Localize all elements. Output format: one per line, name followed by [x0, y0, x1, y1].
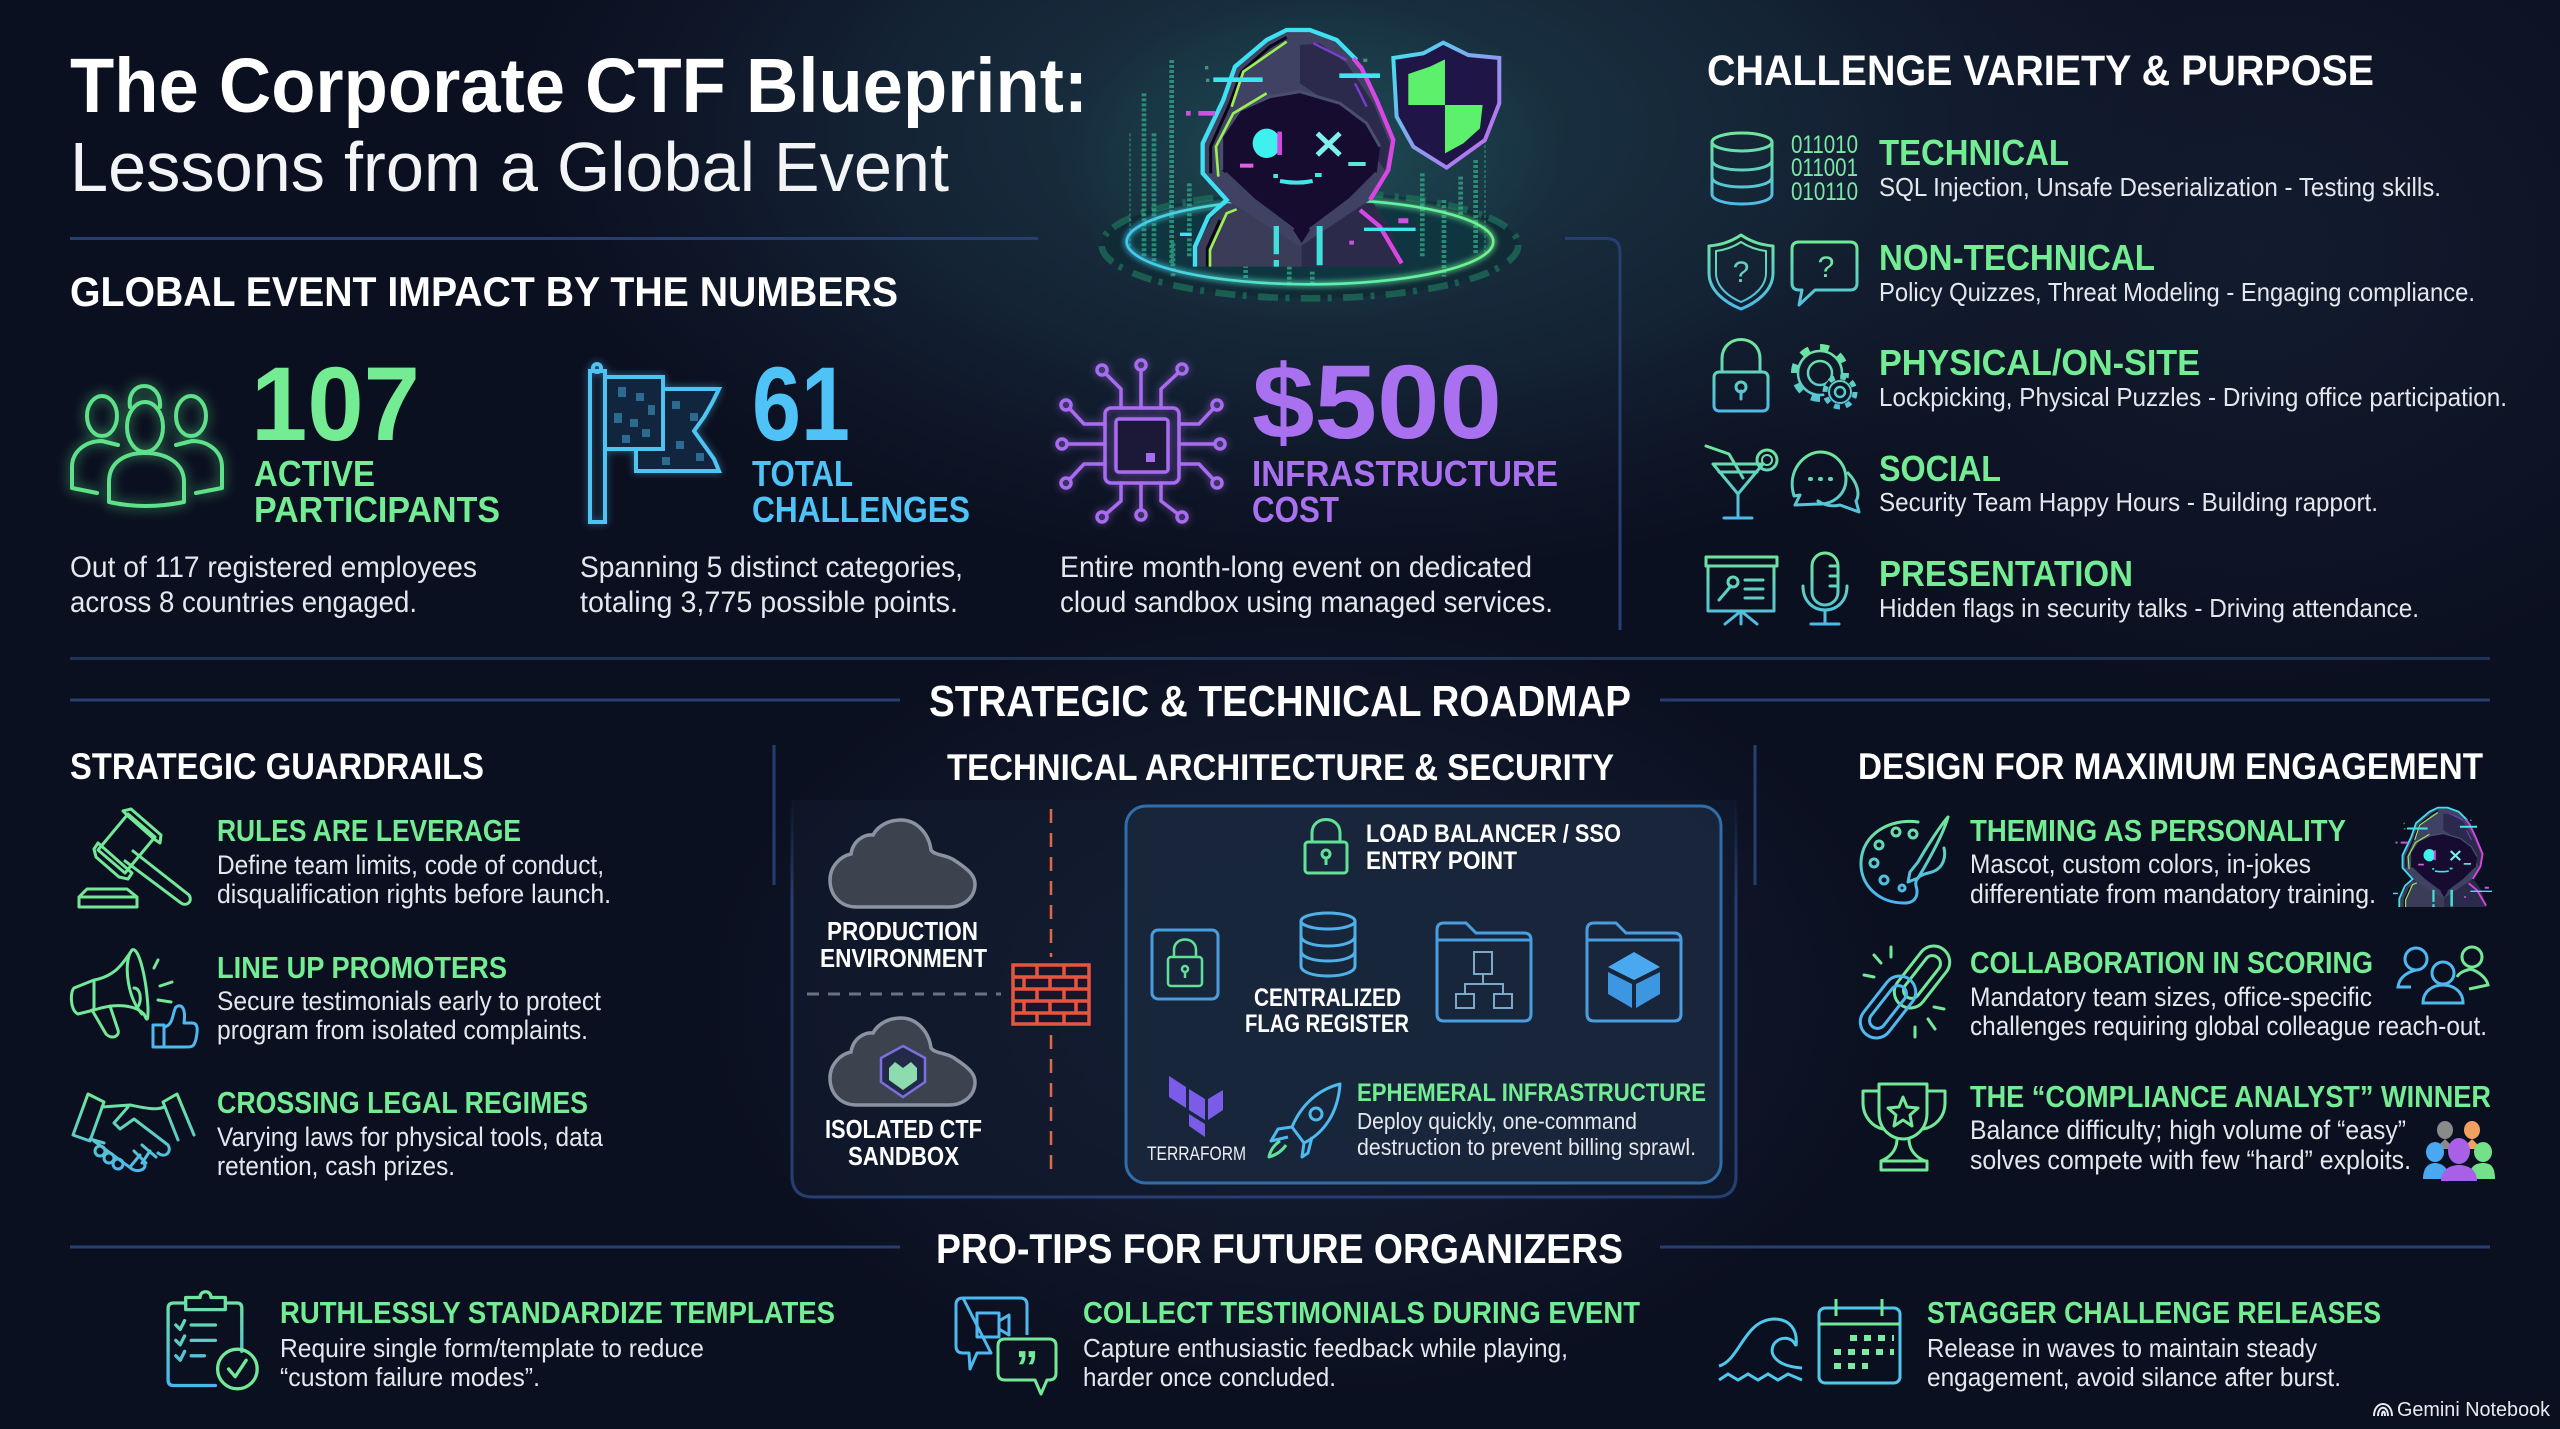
row: non-technical: Policy Quizzes, Threat Modeling - Engaging compliance.: [1879, 277, 2475, 307]
panel: cloud sandbox internals: ENTRY POINT: [1366, 847, 1517, 875]
row: non-technical: [1709, 235, 2475, 309]
item: collaboration in scoring: Mandatory team sizes, office-specific: [1970, 982, 2372, 1012]
item: line up promoters: LINE UP PROMOTERS: [217, 950, 507, 985]
item: crossing legal regimes: retention, cash prizes.: [217, 1151, 455, 1181]
item: crossing legal regimes: Varying laws for physical tools, data: [217, 1122, 604, 1152]
panel: cloud sandbox internals: FLAG REGISTER: [1245, 1010, 1409, 1038]
panel: design for maximum engagement: [1854, 746, 2495, 1181]
item: theming as personality: differentiate from mandatory training.: [1970, 879, 2376, 909]
stat: 107 active participants: 107: [251, 346, 420, 463]
item: line up promoters: program from isolated complaints.: [217, 1015, 588, 1045]
section heading: global event impact: GLOBAL EVENT IMPACT BY THE NUMBERS: [70, 268, 898, 315]
icon: firewall: [1013, 965, 1089, 1024]
title: Lessons from a Global Event: [70, 128, 949, 206]
panel: challenge variety and purpose: CHALLENGE VARIETY & PURPOSE: [1707, 47, 2374, 95]
row: physical on-site: PHYSICAL/ON-SITE: [1879, 342, 2200, 383]
stat: $500 infrastructure cost: $500: [1252, 344, 1502, 461]
icon: entry lock: [1305, 820, 1347, 873]
icon: calendar: [1819, 1299, 1900, 1383]
icon: database: [1712, 133, 1772, 204]
stat: 107 active participants: ACTIVE: [254, 453, 375, 494]
icon: folder cube: [1587, 923, 1681, 1021]
item: compliance analyst winner: solves compete with few “hard” exploits.: [1970, 1145, 2411, 1175]
icon: folder network: [1437, 923, 1531, 1021]
hero mascot: hooded hacker with shield on portal ring: [1057, 0, 1563, 327]
icon: gavel: [79, 809, 190, 907]
icon: trophy: [1863, 1084, 1945, 1170]
panel: cloud sandbox internals: [1126, 806, 1721, 1183]
icon: clipboard: [168, 1292, 257, 1389]
icon: terraform logo: [1169, 1076, 1223, 1137]
panel: cloud sandbox internals: TERRAFORM: [1147, 1144, 1246, 1165]
item: theming as personality: [1861, 808, 2492, 909]
icon: shield and question bubble: [1709, 235, 1773, 309]
row: physical on-site: [1714, 340, 2507, 412]
item: crossing legal regimes: CROSSING LEGAL REGIMES: [217, 1085, 588, 1120]
tip: collect testimonials: Capture enthusiastic feedback while playing,: [1083, 1333, 1568, 1363]
icon: cocktail: [1706, 446, 1777, 518]
tip: standardize templates: RUTHLESSLY STANDARDIZE TEMPLATES: [280, 1295, 835, 1330]
tip: standardize templates: “custom failure modes”.: [280, 1362, 540, 1392]
icon: megaphone with thumbs up: [71, 950, 172, 1037]
row: technical: 011010: [1791, 131, 1858, 159]
tip: standardize templates: Require single form/template to reduce: [280, 1333, 704, 1363]
item: line up promoters: [71, 950, 601, 1047]
item: theming as personality: THEMING AS PERSONALITY: [1970, 813, 2346, 848]
stat: 107 active participants: across 8 countries engaged.: [70, 586, 417, 619]
icon: presentation board: [1706, 557, 1777, 624]
title: [70, 43, 1088, 206]
item: rules are leverage: RULES ARE LEVERAGE: [217, 813, 521, 848]
stat: $500 infrastructure cost: INFRASTRUCTURE: [1252, 453, 1558, 494]
zone: production and sandbox: PRODUCTION: [827, 916, 978, 946]
stat: 61 total challenges: [580, 346, 970, 619]
stat: $500 infrastructure cost: cloud sandbox using managed services.: [1060, 586, 1553, 619]
item: line up promoters: Secure testimonials early to protect: [217, 986, 601, 1016]
zone: production and sandbox: ENVIRONMENT: [820, 943, 987, 973]
item: theming as personality: Mascot, custom colors, in-jokes: [1970, 849, 2311, 879]
icon: video and quote bubbles: ”: [1016, 1341, 1038, 1393]
item: collaboration in scoring: [1854, 940, 2488, 1044]
panel: cloud sandbox internals: Deploy quickly, one-command: [1357, 1108, 1637, 1134]
icon: flag register database: [1301, 913, 1355, 976]
row: social: Security Team Happy Hours - Building rapport.: [1879, 487, 2378, 517]
stat: 61 total challenges: CHALLENGES: [752, 489, 970, 530]
icon: palette and brush: [1861, 817, 1948, 903]
panel: strategic guardrails: [70, 746, 611, 1181]
section heading: pro-tips: PRO-TIPS FOR FUTURE ORGANIZERS: [936, 1225, 1623, 1272]
icon: chat bubbles: [1792, 452, 1859, 512]
tip: stagger releases: Release in waves to maintain steady: [1927, 1333, 2317, 1363]
stat: 61 total challenges: TOTAL: [752, 453, 853, 494]
section heading: roadmap: STRATEGIC & TECHNICAL ROADMAP: [929, 677, 1631, 726]
tip: stagger releases: engagement, avoid silance after burst.: [1927, 1362, 2341, 1392]
stat: 107 active participants: PARTICIPANTS: [254, 489, 500, 530]
zone: production and sandbox: ISOLATED CTF: [825, 1114, 982, 1144]
tip: collect testimonials: harder once concluded.: [1083, 1362, 1336, 1392]
watermark: Gemini Notebook: [2397, 1399, 2551, 1421]
stat: $500 infrastructure cost: COST: [1252, 489, 1339, 530]
icon: circuit chip: [1057, 360, 1225, 522]
tip: collect testimonials: COLLECT TESTIMONIALS DURING EVENT: [1083, 1295, 1640, 1330]
row: presentation: Hidden flags in security talks - Driving attendance.: [1879, 593, 2419, 623]
panel: technical architecture and security: TECHNICAL ARCHITECTURE & SECURITY: [947, 747, 1614, 788]
item: collaboration in scoring: challenges requiring global colleague reach-out.: [1970, 1011, 2487, 1041]
item: collaboration in scoring: COLLABORATION IN SCORING: [1970, 945, 2373, 980]
stat: $500 infrastructure cost: Entire month-long event on dedicated: [1060, 551, 1532, 584]
panel: technical architecture and security: [792, 747, 1736, 1197]
icon: production cloud: [830, 820, 975, 907]
icon: pixel flag: [590, 364, 719, 522]
icon: padlock: [1714, 340, 1768, 411]
item: crossing legal regimes: [73, 1085, 604, 1181]
icon: gears: [1794, 347, 1856, 408]
icon: wave: [1719, 1319, 1802, 1380]
row: presentation: [1706, 553, 2419, 624]
panel: cloud sandbox internals: LOAD BALANCER / SSO: [1366, 820, 1621, 848]
title: The Corporate CTF Blueprint:: [70, 43, 1088, 129]
tip: standardize templates: [168, 1292, 835, 1392]
item: compliance analyst winner: [1863, 1079, 2495, 1181]
icon: team people: [2398, 947, 2488, 1003]
tip: collect testimonials: [956, 1295, 1640, 1394]
panel: challenge variety and purpose: [1706, 47, 2507, 624]
row: social: SOCIAL: [1879, 448, 2001, 489]
icon: chain link: [1854, 940, 1956, 1044]
zone: production and sandbox: SANDBOX: [848, 1141, 960, 1171]
tip: stagger releases: [1719, 1295, 2381, 1392]
row: physical on-site: Lockpicking, Physical Puzzles - Driving office participation.: [1879, 382, 2507, 412]
icon: video and quote bubbles: [956, 1298, 1056, 1394]
item: compliance analyst winner: Balance difficulty; high volume of “easy”: [1970, 1115, 2406, 1145]
stat: 61 total challenges: 61: [752, 346, 850, 463]
stat: 107 active participants: [70, 346, 500, 619]
icon: sandbox cloud with shield: [830, 1018, 975, 1105]
stat: 107 active participants: Out of 117 registered employees: [70, 551, 477, 584]
panel: cloud sandbox internals: EPHEMERAL INFRASTRUCTURE: [1357, 1079, 1706, 1107]
row: technical: 010110: [1791, 178, 1858, 206]
row: non-technical: ?: [1818, 251, 1834, 284]
panel: cloud sandbox internals: CENTRALIZED: [1254, 984, 1401, 1012]
item: compliance analyst winner: THE “COMPLIANCE ANALYST” WINNER: [1970, 1079, 2491, 1114]
row: non-technical: NON-TECHNICAL: [1879, 237, 2155, 278]
row: technical: 011001: [1791, 154, 1858, 182]
icon: microphone: [1803, 553, 1847, 624]
icon: colored people group: [2423, 1121, 2495, 1181]
panel: strategic guardrails: STRATEGIC GUARDRAILS: [70, 746, 484, 787]
icon: rocket: [1269, 1084, 1340, 1157]
item: rules are leverage: [79, 809, 611, 909]
stat: $500 infrastructure cost: [1057, 344, 1558, 619]
row: technical: TECHNICAL: [1879, 132, 2069, 173]
icon: shield and question bubble: ?: [1733, 256, 1749, 289]
icon: boxed lock: [1152, 930, 1218, 999]
item: rules are leverage: disqualification rights before launch.: [217, 879, 611, 909]
zone: production and sandbox: [807, 809, 1089, 1179]
icon: handshake: [73, 1094, 194, 1171]
panel: design for maximum engagement: DESIGN FOR MAXIMUM ENGAGEMENT: [1858, 746, 2483, 787]
item: rules are leverage: Define team limits, code of conduct,: [217, 850, 604, 880]
row: social: [1706, 446, 2378, 518]
stat: 61 total challenges: Spanning 5 distinct categories,: [580, 551, 963, 584]
icon: people group: [72, 386, 222, 506]
tip: stagger releases: STAGGER CHALLENGE RELEASES: [1927, 1295, 2381, 1330]
icon: mini mascot: [2393, 808, 2492, 907]
row: technical: SQL Injection, Unsafe Deserialization - Testing skills.: [1879, 172, 2441, 202]
panel: cloud sandbox internals: destruction to prevent billing sprawl.: [1357, 1134, 1696, 1160]
row: presentation: PRESENTATION: [1879, 553, 2133, 594]
row: technical: [1712, 131, 2441, 206]
stat: 61 total challenges: totaling 3,775 possible points.: [580, 586, 958, 619]
